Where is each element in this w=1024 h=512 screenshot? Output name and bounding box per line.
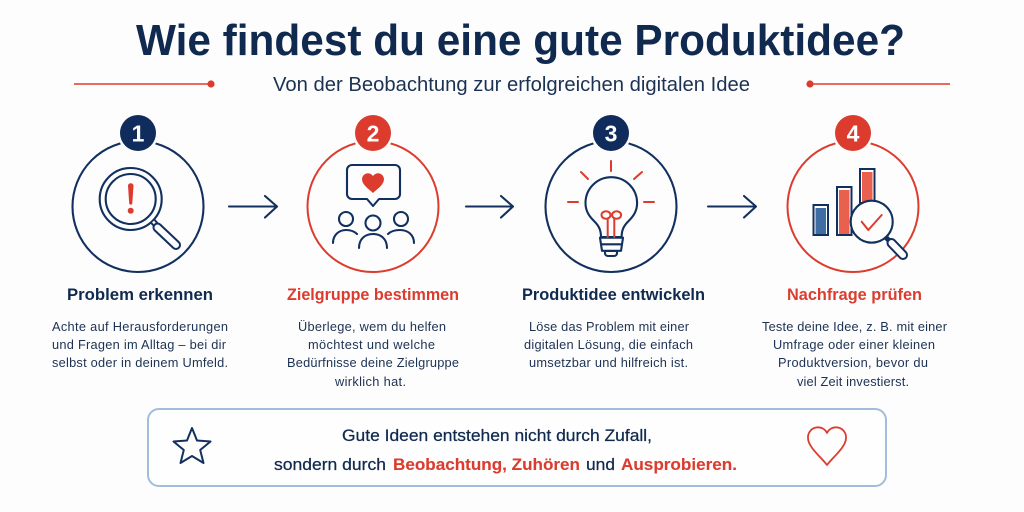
step 1 text: [52, 319, 228, 370]
step 2 text: Bedürfnisse deine Zielgruppe: [287, 355, 459, 370]
icon: speech bubble with heart: [347, 165, 400, 206]
arrow 2 to 3: [466, 196, 513, 218]
step 1 text: Achte auf Herausforderungen: [52, 319, 228, 334]
step 4 text: viel Zeit investierst.: [797, 374, 909, 389]
step 3 text: umsetzbar und hilfreich ist.: [529, 355, 688, 370]
left title rule: [74, 80, 215, 88]
step 2 text: möchtest und welche: [308, 337, 435, 352]
icon: light bulb: [568, 161, 654, 256]
callout text: Beobachtung, Zuhören: [393, 456, 580, 474]
step 2 ring: [308, 141, 438, 272]
icon: magnifier with check mark: [851, 201, 903, 255]
step 3 badge: 3: [605, 120, 617, 146]
step 1 text: und Fragen im Alltag – bei dir: [52, 337, 227, 352]
step 3 ring: [546, 141, 676, 272]
arrow 3 to 4: [708, 196, 756, 218]
step 1 heading: Problem erkennen: [67, 285, 213, 304]
step 3 badge: [590, 112, 632, 154]
callout text: sondern durch: [274, 456, 386, 474]
step 2 heading: Zielgruppe bestimmen: [287, 285, 459, 304]
icon: heart: [808, 427, 846, 465]
icon: star: [174, 428, 210, 463]
step 2 text: wirklich hat.: [334, 374, 406, 389]
step 1 badge: 1: [132, 120, 145, 146]
panel: step 4: [762, 112, 948, 389]
step 3 text: [524, 319, 693, 370]
panel: step 2: [287, 112, 459, 389]
callout box: [148, 409, 886, 486]
step 1 ring: [72, 141, 204, 272]
panel: step 1: [52, 112, 228, 370]
arrow 1 to 2: [229, 196, 277, 218]
right title rule: [806, 80, 950, 88]
step 4 heading: Nachfrage prüfen: [787, 285, 922, 304]
step 2 text: Überlege, wem du helfen: [298, 319, 446, 334]
step 1 badge: [118, 112, 158, 154]
step 4 ring: [788, 141, 918, 272]
callout text: [274, 427, 737, 474]
callout text: Ausprobieren.: [621, 456, 737, 474]
step 1 text: selbst oder in deinem Umfeld.: [52, 355, 228, 370]
step 2 text: [287, 319, 459, 389]
step 2 badge: [352, 112, 394, 154]
icon: bar chart: [814, 169, 874, 235]
step 4 badge: [832, 112, 874, 154]
icon: magnifier with exclamation mark: [100, 168, 176, 245]
step 4 text: Teste deine Idee, z. B. mit einer: [762, 319, 948, 334]
step 4 badge: 4: [847, 120, 860, 146]
subtitle: Von der Beobachtung zur erfolgreichen digitalen Idee: [273, 74, 750, 96]
step 4 text: Umfrage oder einer kleinen: [773, 337, 935, 352]
step 4 text: [762, 319, 948, 389]
callout text: und: [586, 456, 615, 474]
step 2 badge: 2: [367, 120, 379, 146]
panel: step 3: [522, 112, 705, 370]
step 3 text: Löse das Problem mit einer: [529, 319, 690, 334]
step 3 text: digitalen Lösung, die einfach: [524, 337, 693, 352]
step 3 heading: Produktidee entwickeln: [522, 285, 705, 304]
callout text: Gute Ideen entstehen nicht durch Zufall,: [342, 427, 652, 445]
icon: three people: [333, 212, 414, 248]
step 4 text: Produktversion, bevor du: [778, 355, 928, 370]
panel: takeaway callout: [148, 409, 886, 486]
title: Wie findest du eine gute Produktidee?: [136, 16, 905, 65]
